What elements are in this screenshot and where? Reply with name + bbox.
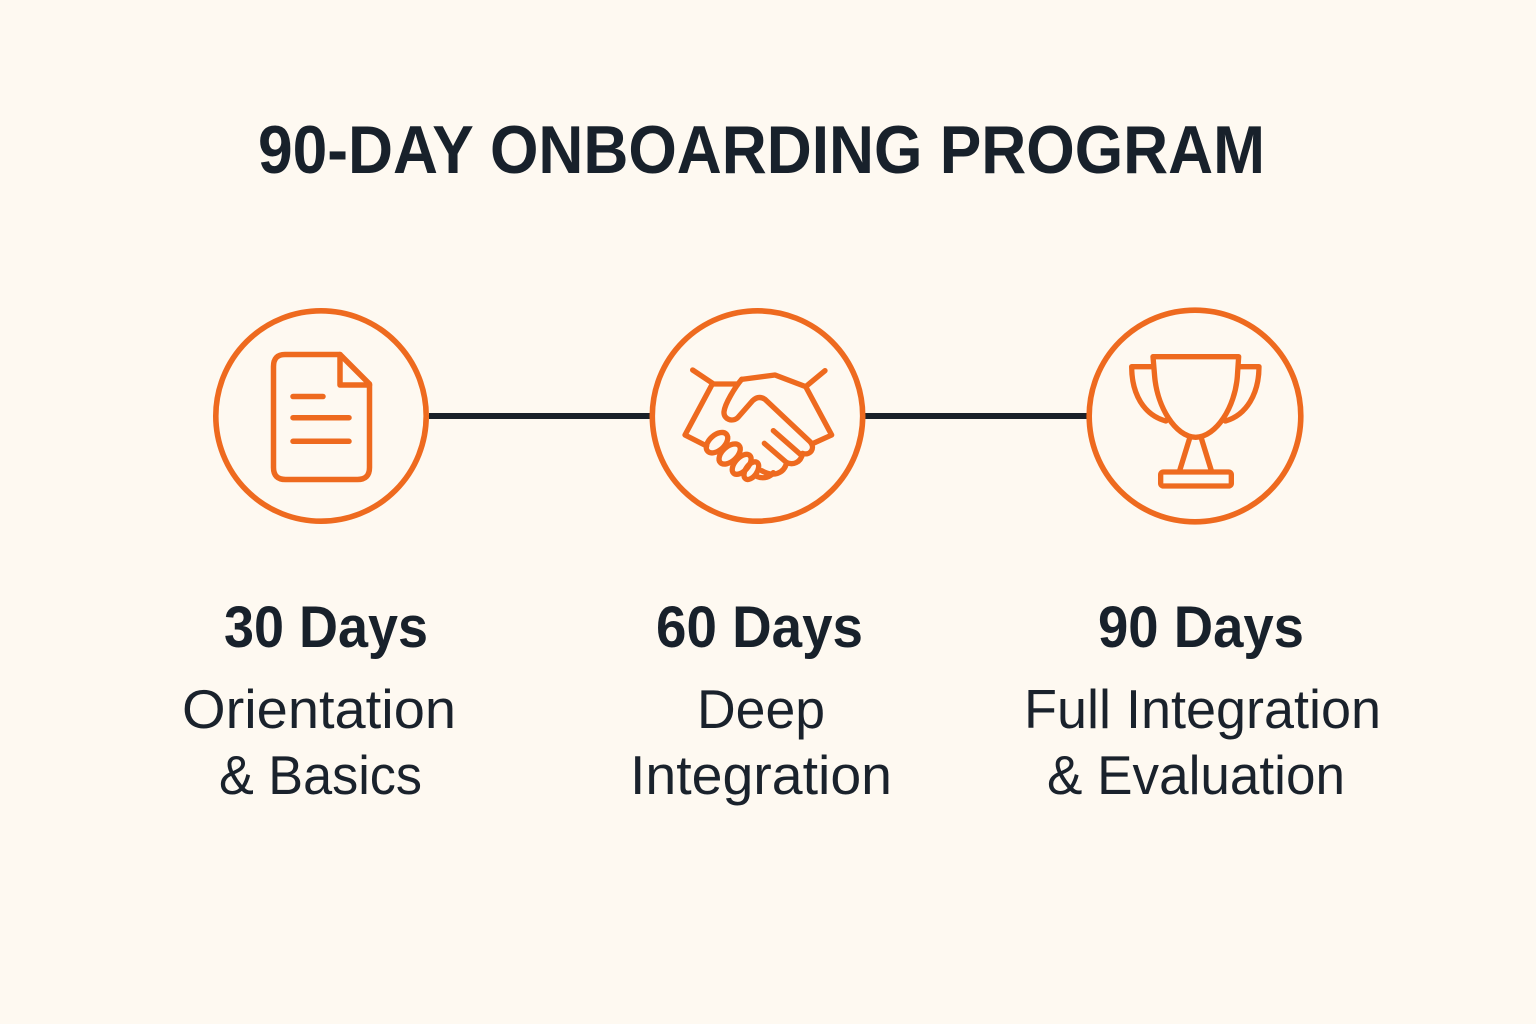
step 1 label: 30 Days [224,595,428,660]
step 1 circle with document icon [216,311,426,521]
step 2 label: Integration [630,744,892,806]
title: 90-DAY ONBOARDING PROGRAM [258,112,1265,188]
step 3 label [1024,595,1381,806]
step 2 label: 60 Days [656,595,863,660]
icon: trophy [1132,357,1259,486]
step 1 label: & Basics [219,744,422,806]
step 3 label: 90 Days [1098,595,1304,660]
connector: step 2 to step 3 [865,413,1087,419]
step 1 label: Orientation [182,678,456,740]
step 3 label: Full Integration [1024,678,1381,740]
step 1 label [182,595,456,806]
step 2 label: Deep [697,678,825,740]
step 3 label: & Evaluation [1047,744,1345,806]
icon: document [274,354,370,480]
step 3 circle with trophy icon [1089,310,1301,522]
icon: handshake [685,370,832,482]
step 2 circle with handshake icon [652,311,863,521]
connector: step 1 to step 2 [429,413,650,419]
step 2 label [630,595,892,806]
